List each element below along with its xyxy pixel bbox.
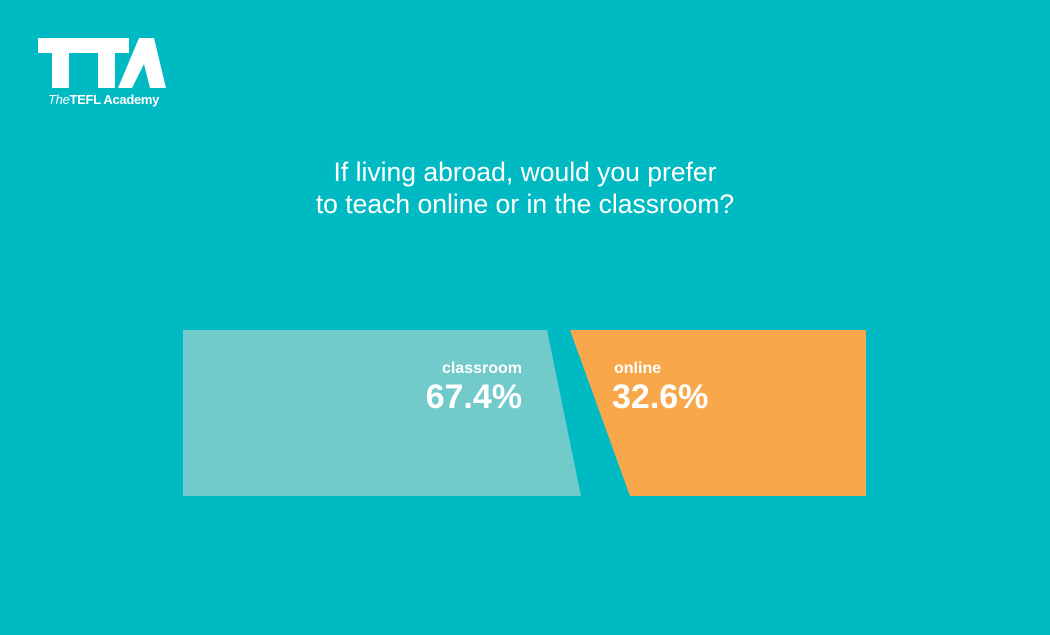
logo letters TT [38,38,166,88]
logo [38,38,166,107]
title: to teach online or in the classroom? [316,189,734,219]
title [316,157,734,219]
bar: classroom: 67.4% [426,378,522,416]
title: If living abroad, would you prefer [334,157,716,187]
bar: classroom: classroom [442,360,522,377]
bar: online: online [614,360,661,377]
bar: classroom [183,330,581,496]
logo wordmark: TheTEFL Academy [48,92,160,107]
bar: online: 32.6% [612,378,708,416]
bar: online [570,330,866,496]
